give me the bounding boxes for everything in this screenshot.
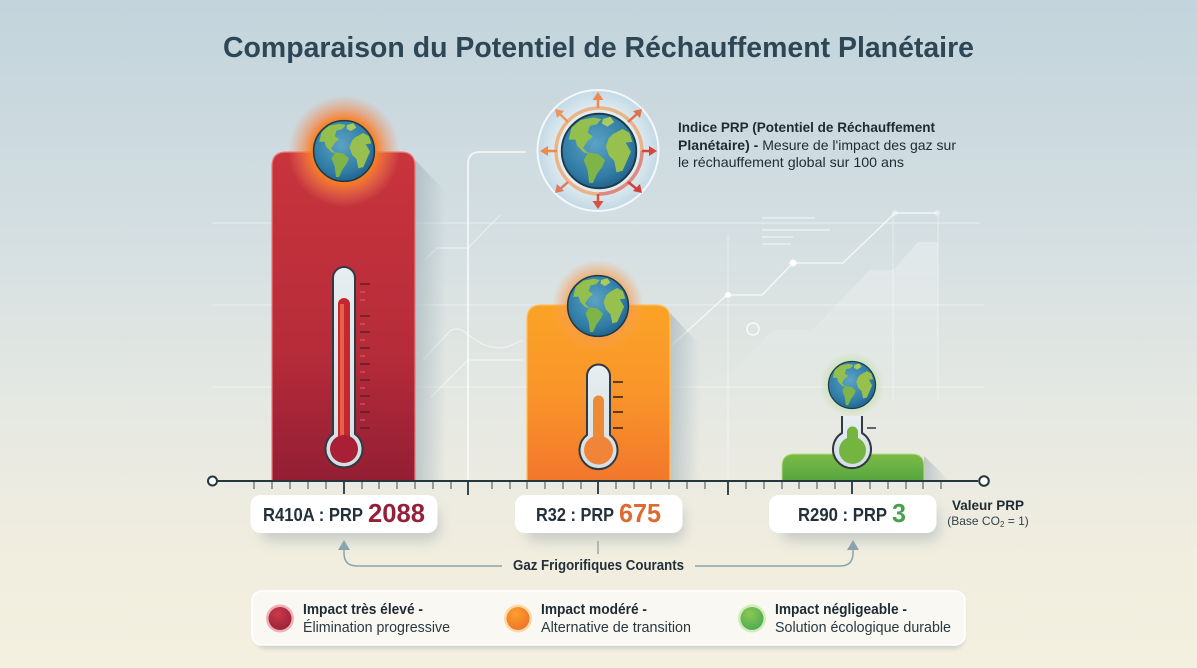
thermometer: R32 <box>579 364 623 469</box>
legend item: very high impact <box>266 602 450 636</box>
label: R290: 3 <box>892 498 906 528</box>
arrows: common refrigerant gases <box>338 540 859 566</box>
text: PRP definition: Planétaire) - Mesure de l'impact des gaz sur <box>678 137 956 153</box>
text: axis unit: Valeur PRP <box>952 497 1024 513</box>
text: PRP definition: Indice PRP (Potentiel de Réchauffement <box>678 119 935 135</box>
label: R410A <box>250 495 440 542</box>
text: axis unit <box>947 497 1029 529</box>
bar: R32 <box>527 260 700 481</box>
text: PRP definition <box>678 119 956 170</box>
bar: R290 <box>782 352 950 481</box>
text: axis unit: = 1) <box>1004 514 1029 528</box>
bar: R410A <box>272 95 446 481</box>
label: R290 <box>769 495 940 542</box>
legend item: moderate impact: Impact modéré - <box>541 602 647 618</box>
legend item: negligible impact: Impact négligeable - <box>775 602 907 618</box>
globe: R32 warm <box>552 260 644 352</box>
legend item: moderate impact: Alternative de transition <box>541 620 691 636</box>
label: R410A: R410A : PRP <box>263 504 363 525</box>
label: R410A: 2088 <box>368 498 425 528</box>
label: R32 <box>515 495 685 542</box>
text: PRP definition: le réchauffement global sur 100 ans <box>678 154 904 170</box>
text: axis unit: (Base CO <box>947 514 1000 528</box>
thermometer: R290 <box>833 416 876 468</box>
legend item: negligible impact <box>738 602 951 636</box>
background faint chart <box>212 152 985 481</box>
text: axis unit: 2 <box>1000 520 1005 529</box>
legend item: negligible impact: Solution écologique durable <box>775 620 951 636</box>
legend item: moderate impact <box>504 602 691 636</box>
label: R290: R290 : PRP <box>798 504 887 525</box>
legend item: very high impact: Élimination progressive <box>303 619 450 636</box>
label: R32: 675 <box>619 498 661 528</box>
label: R32: R32 : PRP <box>536 504 614 525</box>
axis: PRP value <box>208 476 989 495</box>
icon: PRP global warming globe <box>538 90 658 211</box>
text: common refrigerant gases: Gaz Frigorifiques Courants <box>513 558 684 574</box>
globe: R410A overheated <box>288 95 400 207</box>
thermometer: R410A <box>326 267 370 467</box>
legend item: very high impact: Impact très élevé - <box>303 602 423 618</box>
globe: R290 cool <box>819 352 885 418</box>
legend <box>252 591 965 649</box>
title: Comparaison du Potentiel de Réchauffement Planétaire <box>223 32 974 64</box>
